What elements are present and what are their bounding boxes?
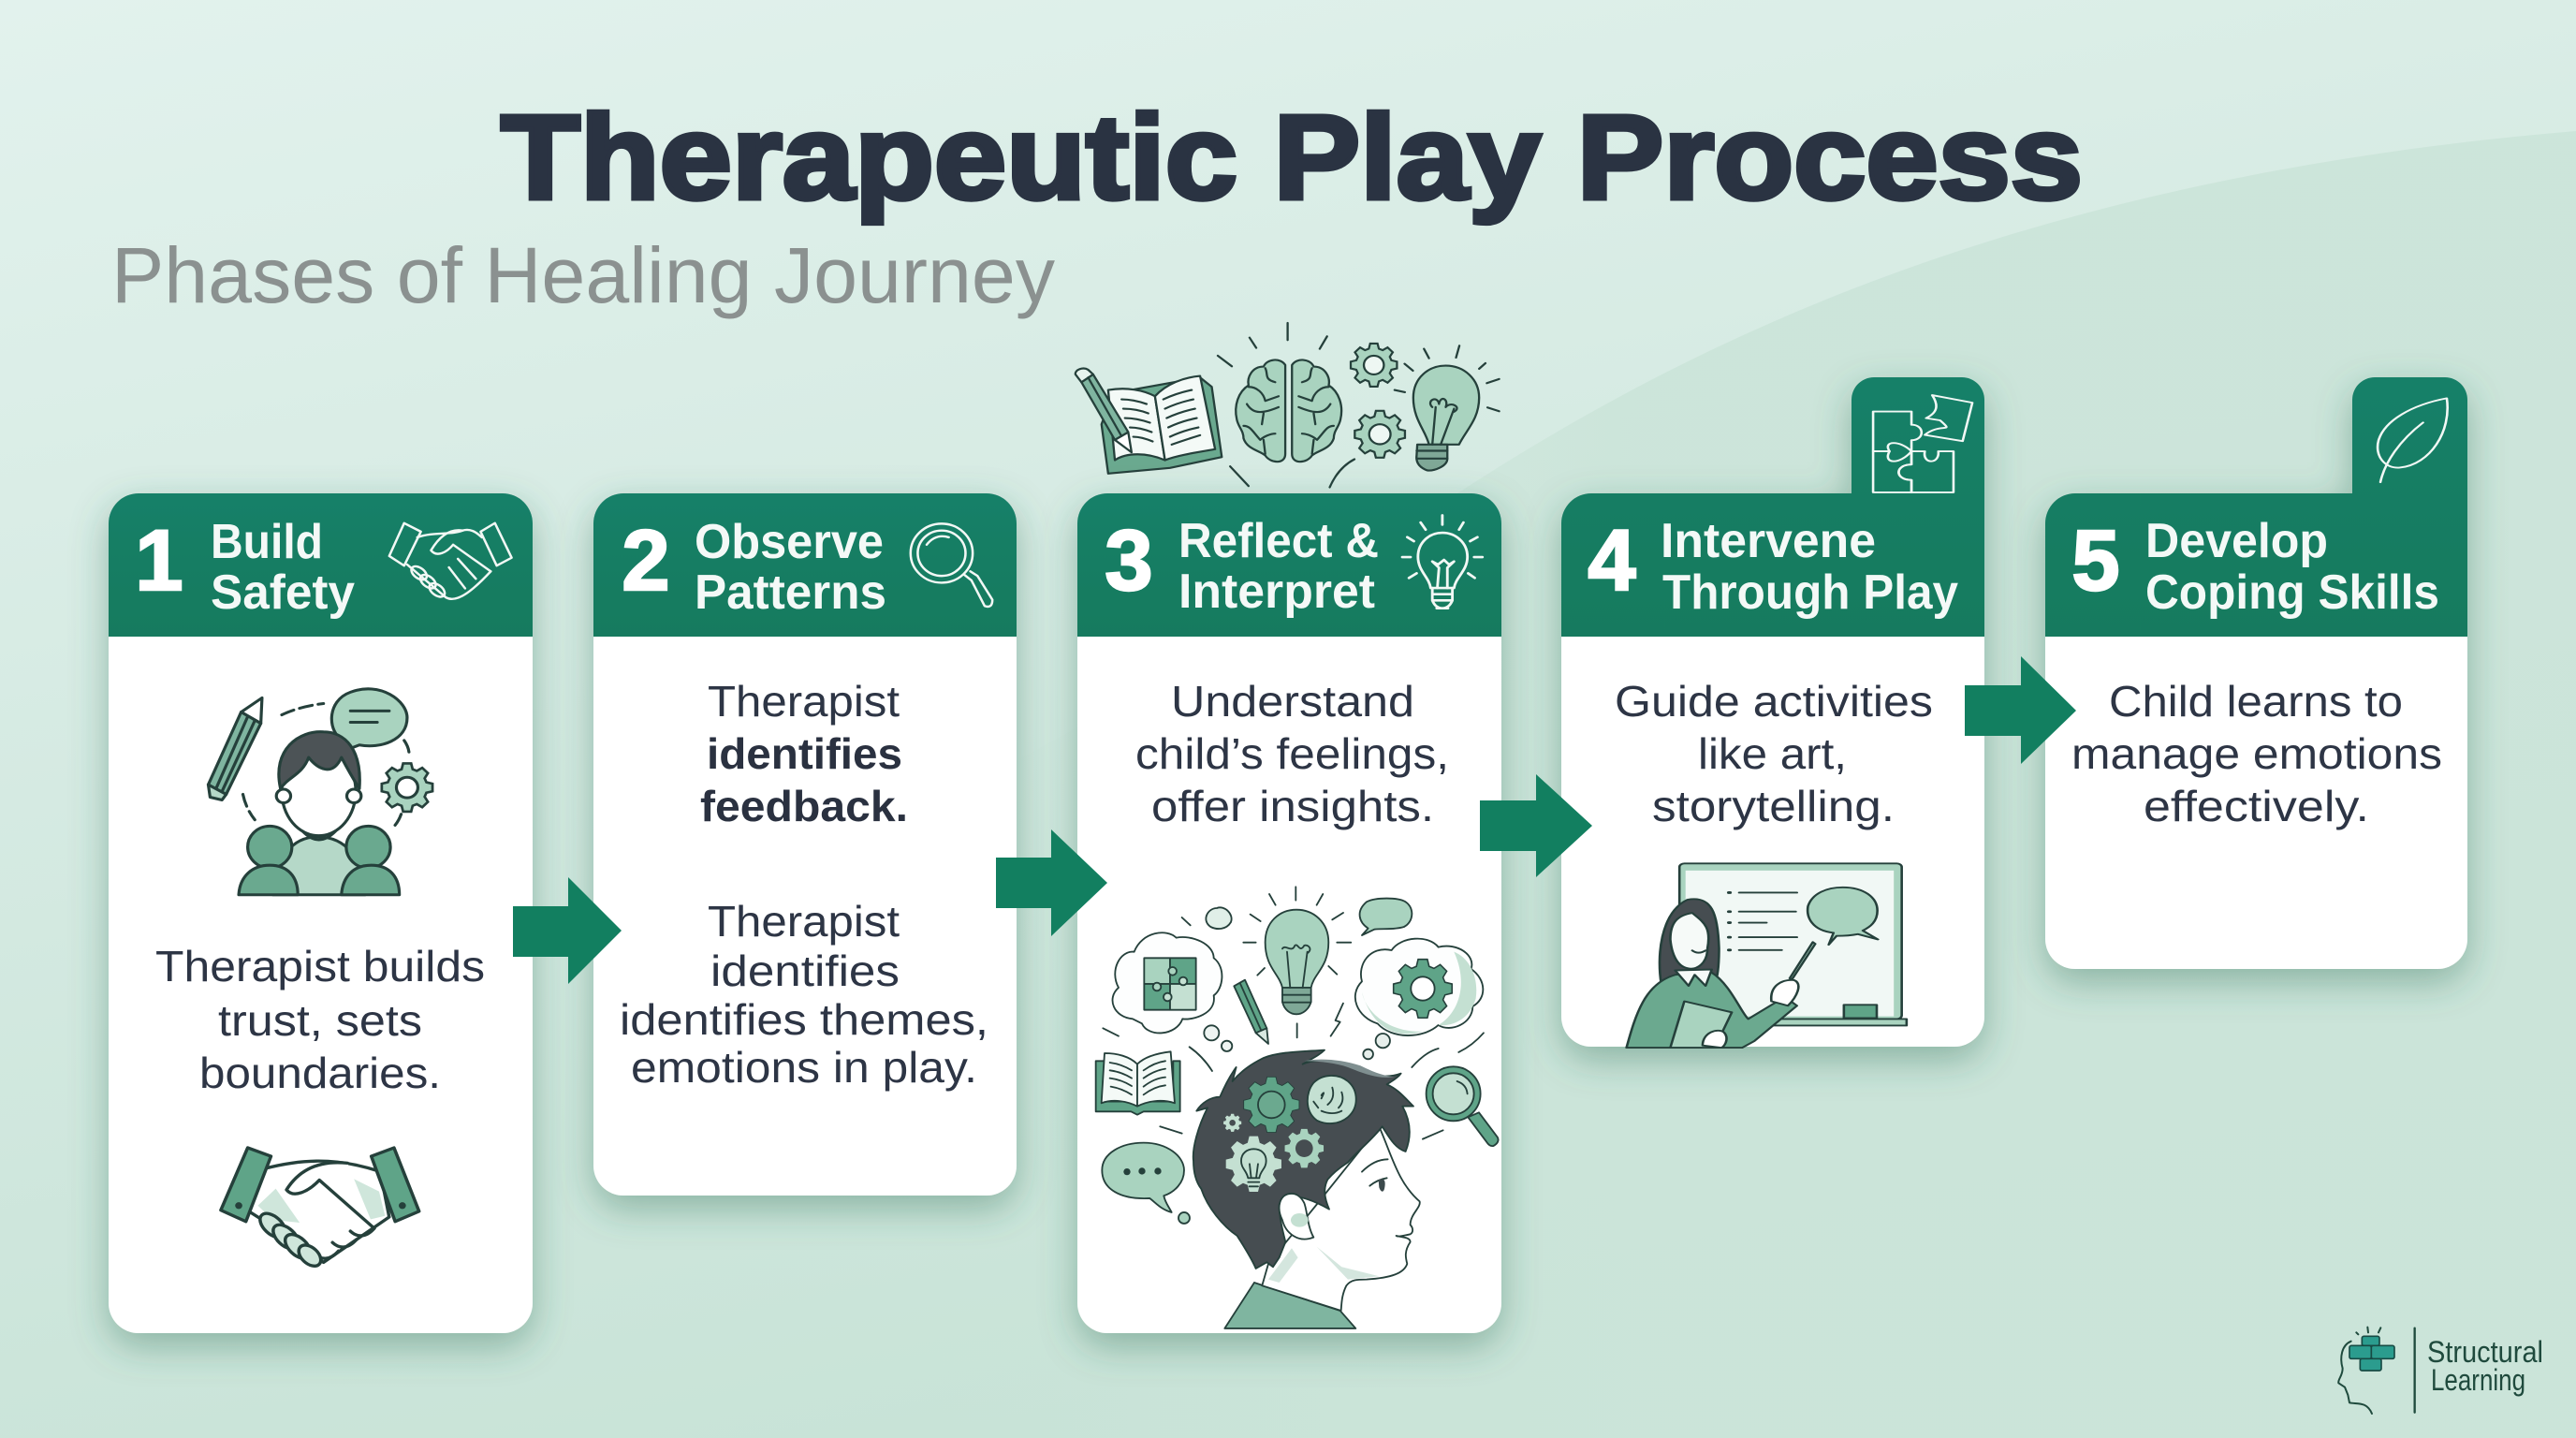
panel: step 3 reflect and interpret <box>1076 323 1501 1333</box>
card 2 body text: first block: identifies <box>707 729 902 778</box>
card 4 body <box>1561 377 1984 1047</box>
panel: step 4 intervene through play <box>1561 377 1984 1048</box>
card 1 heading <box>211 515 355 620</box>
card 1 heading: Safety <box>211 565 355 620</box>
card 1 body text: boundaries. <box>199 1049 441 1097</box>
card 1 heading: Build <box>211 515 323 569</box>
logo mark <box>2338 1328 2415 1414</box>
card 3 body text: offer insights. <box>1151 782 1434 830</box>
card 5 body <box>2045 377 2467 969</box>
illustration: therapist with children <box>208 689 432 895</box>
card 4 body text: Guide activities <box>1615 677 1933 726</box>
neck and face <box>1262 1126 1420 1311</box>
card 3 body text: Understand <box>1171 677 1414 726</box>
hair <box>1193 1050 1413 1269</box>
icon: magnifying glass <box>911 523 992 607</box>
card 4 body text: storytelling. <box>1652 782 1895 830</box>
card 5 body text: manage emotions <box>2071 729 2442 778</box>
card 4 body text: like art, <box>1698 729 1847 778</box>
card 1 body text: trust, sets <box>218 996 422 1045</box>
illustration: teacher at whiteboard <box>1627 863 1907 1048</box>
card 3 heading <box>1178 514 1379 619</box>
card 2 body <box>593 493 1017 1196</box>
magnifying glass <box>1427 1066 1499 1146</box>
pencil <box>1234 980 1268 1044</box>
card 2 heading: Patterns <box>695 565 886 620</box>
card 1 body text: Therapist builds <box>155 942 485 990</box>
arrow: step 2 to 3 <box>996 829 1107 936</box>
card 5 body text: Child learns to <box>2109 677 2403 726</box>
logo: Structural Learning <box>2338 1328 2543 1414</box>
card 1 body text <box>155 942 485 1097</box>
illustration: book, brain, gears, bulb above card <box>1076 323 1500 487</box>
card 2 heading <box>695 515 886 620</box>
arrow: step 3 to 4 <box>1480 774 1592 877</box>
illustration: child's head with thoughts <box>1096 887 1499 1328</box>
card 3 heading: Interpret <box>1178 565 1375 619</box>
card 3 number: 3 <box>1105 513 1153 609</box>
arrow: step 4 to 5 <box>1965 656 2076 764</box>
card 2 body text: second block: identifies themes, <box>620 995 988 1044</box>
card 2 body text: first block: feedback. <box>700 782 908 830</box>
panel: step 5 develop coping skills <box>2045 377 2467 969</box>
subtitle: Phases of Healing Journey <box>111 231 1055 319</box>
panel: step 2 observe patterns <box>593 493 1017 1196</box>
card 1 number: 1 <box>135 513 183 609</box>
illustration: handshake <box>221 1148 419 1270</box>
icon: puzzle pieces <box>1873 395 1972 492</box>
open book <box>1096 1051 1180 1115</box>
card 5 heading: Coping Skills <box>2145 565 2439 620</box>
card 2 body text: second block: emotions in play. <box>631 1043 977 1092</box>
card 2 body text: first block: Therapist <box>708 677 900 726</box>
card 2 body text: first block <box>700 677 908 830</box>
card 2 heading: Observe <box>695 515 884 569</box>
card 5 body text <box>2071 677 2442 830</box>
card 2 body text: second block: Therapist <box>708 897 900 946</box>
logo wordmark: Learning <box>2431 1363 2525 1397</box>
card 5 heading: Develop <box>2145 514 2328 568</box>
card 2 number: 2 <box>622 513 670 609</box>
card 2 body text: second block <box>620 897 988 1092</box>
icon: header light bulb <box>1402 515 1483 609</box>
card 5 body text: effectively. <box>2144 782 2369 830</box>
ear <box>1280 1194 1313 1240</box>
gears in head <box>1223 1076 1356 1192</box>
card 4 body text <box>1615 677 1933 830</box>
light bulb <box>1243 887 1351 1014</box>
title: Therapeutic Play Process <box>501 91 2083 225</box>
icon: leaf <box>2378 398 2448 482</box>
card 3 heading: Reflect & <box>1178 514 1379 568</box>
thought cloud with puzzle <box>1113 932 1222 1033</box>
arrow: step 1 to 2 <box>513 877 622 984</box>
shirt <box>1224 1283 1355 1328</box>
card 4 heading: Intervene <box>1661 514 1876 568</box>
card 5 heading <box>2145 514 2439 620</box>
thought cloud with gear <box>1355 939 1483 1035</box>
logo wordmark: Structural <box>2427 1335 2543 1369</box>
logo wordmark <box>2427 1335 2543 1397</box>
card 2 body text: second block: identifies <box>710 946 900 995</box>
card 1 body <box>109 493 533 1333</box>
icon: header handshake <box>389 523 512 599</box>
card 3 body text <box>1135 677 1449 830</box>
card 3 body <box>1077 493 1501 1333</box>
card 4 number: 4 <box>1588 513 1636 609</box>
card 3 body text: child’s feelings, <box>1135 729 1449 778</box>
card 4 heading: Through Play <box>1662 565 1958 620</box>
panel: step 1 build safety <box>109 493 533 1333</box>
speech bubble <box>1102 1143 1190 1224</box>
card 5 number: 5 <box>2071 513 2120 609</box>
card 4 heading <box>1661 514 1958 620</box>
